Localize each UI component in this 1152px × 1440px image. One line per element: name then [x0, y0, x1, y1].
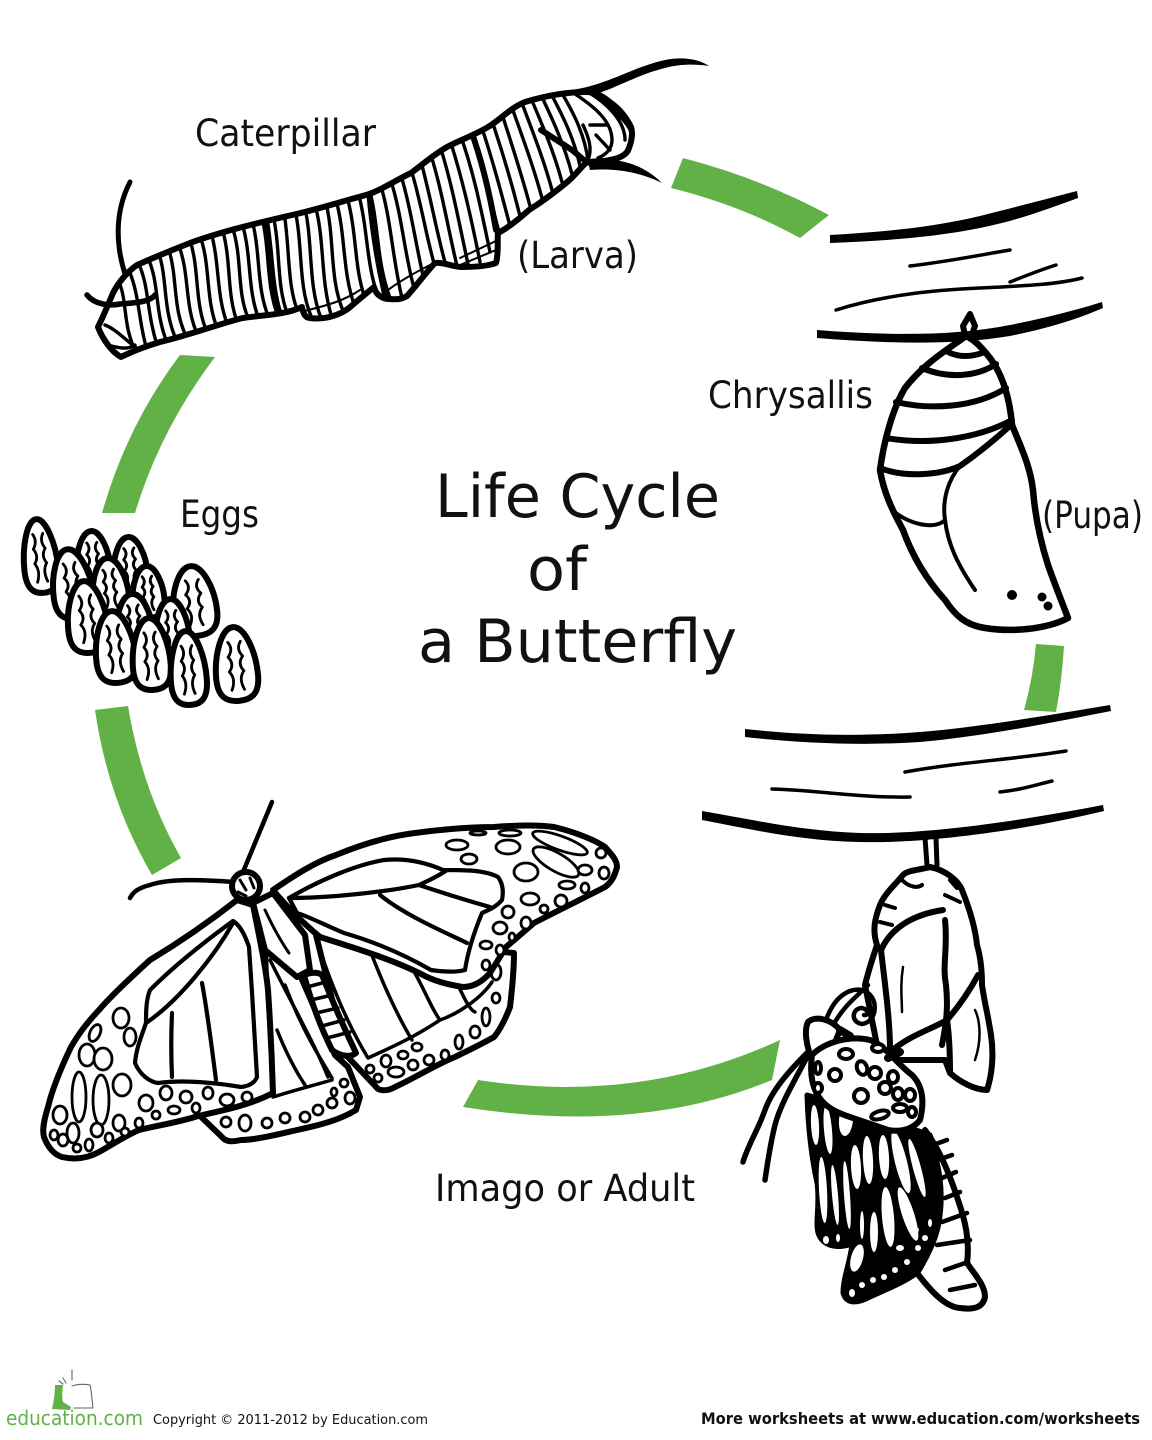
label: eggs: Eggs — [180, 493, 259, 536]
egg — [130, 565, 166, 619]
left forewing cell and veins — [135, 921, 257, 1087]
curled proboscis — [826, 985, 875, 1024]
head — [232, 872, 260, 900]
illustration: emerging butterfly — [743, 838, 992, 1309]
title: a Butterfly — [418, 607, 737, 677]
footer: education.com logo — [6, 1370, 143, 1430]
right forewing — [273, 826, 617, 987]
illustration: caterpillar — [87, 58, 709, 357]
antennae — [130, 802, 272, 898]
body — [253, 893, 310, 977]
egg — [153, 598, 191, 658]
egg — [91, 609, 139, 685]
right forewing cell and veins — [289, 859, 503, 972]
illustration: branch for emerging butterfly — [702, 705, 1111, 842]
label: caterpillar: Caterpillar — [195, 112, 377, 155]
title: of — [527, 535, 589, 605]
spots on left hindwing — [221, 1079, 355, 1131]
left hindwing veins — [270, 960, 332, 1097]
logo wordmark: education.com — [6, 1406, 143, 1430]
spots on right hindwing — [366, 964, 501, 1082]
label: chrysallis: Chrysallis — [708, 374, 873, 417]
left forewing — [43, 900, 273, 1158]
egg — [47, 547, 97, 621]
thorax with spots — [811, 1038, 922, 1131]
egg — [19, 517, 61, 595]
egg — [212, 625, 260, 703]
abdomen — [304, 973, 356, 1056]
illustration: branch for chrysalis — [817, 191, 1103, 343]
left hindwing — [198, 950, 360, 1141]
egg — [111, 536, 149, 594]
spots on left forewing — [50, 1008, 252, 1152]
egg — [89, 556, 131, 618]
egg — [74, 530, 112, 590]
abdomen — [917, 1130, 985, 1309]
arrow: chrysalis to emerging butterfly — [1024, 644, 1064, 712]
right hindwing veins — [318, 945, 492, 1058]
antennae — [743, 1053, 807, 1180]
illustration: adult butterfly — [43, 802, 617, 1158]
spots on right forewing — [446, 827, 609, 970]
egg — [167, 630, 209, 706]
illustration: eggs — [19, 517, 260, 706]
head — [806, 1019, 840, 1060]
title — [418, 462, 737, 677]
footer: copyright: Copyright © 2011-2012 by Education.com — [153, 1412, 428, 1428]
arrow: emerging butterfly to adult — [463, 1040, 780, 1116]
pupal shell — [865, 867, 992, 1090]
egg — [130, 617, 172, 691]
illustration: chrysalis — [880, 314, 1068, 630]
label: larva: (Larva) — [517, 234, 638, 277]
right hindwing — [316, 935, 514, 1090]
arrow: caterpillar to chrysalis — [671, 158, 829, 238]
egg — [63, 579, 111, 655]
egg — [114, 593, 154, 651]
wings — [807, 1095, 942, 1302]
label: imago or adult: Imago or Adult — [435, 1167, 695, 1210]
logo mark — [52, 1385, 71, 1410]
wing cells — [810, 1103, 932, 1297]
egg — [168, 564, 220, 638]
arrow: adult to eggs — [95, 706, 181, 875]
title: Life Cycle — [435, 462, 720, 532]
arrow: eggs to caterpillar — [102, 355, 215, 513]
